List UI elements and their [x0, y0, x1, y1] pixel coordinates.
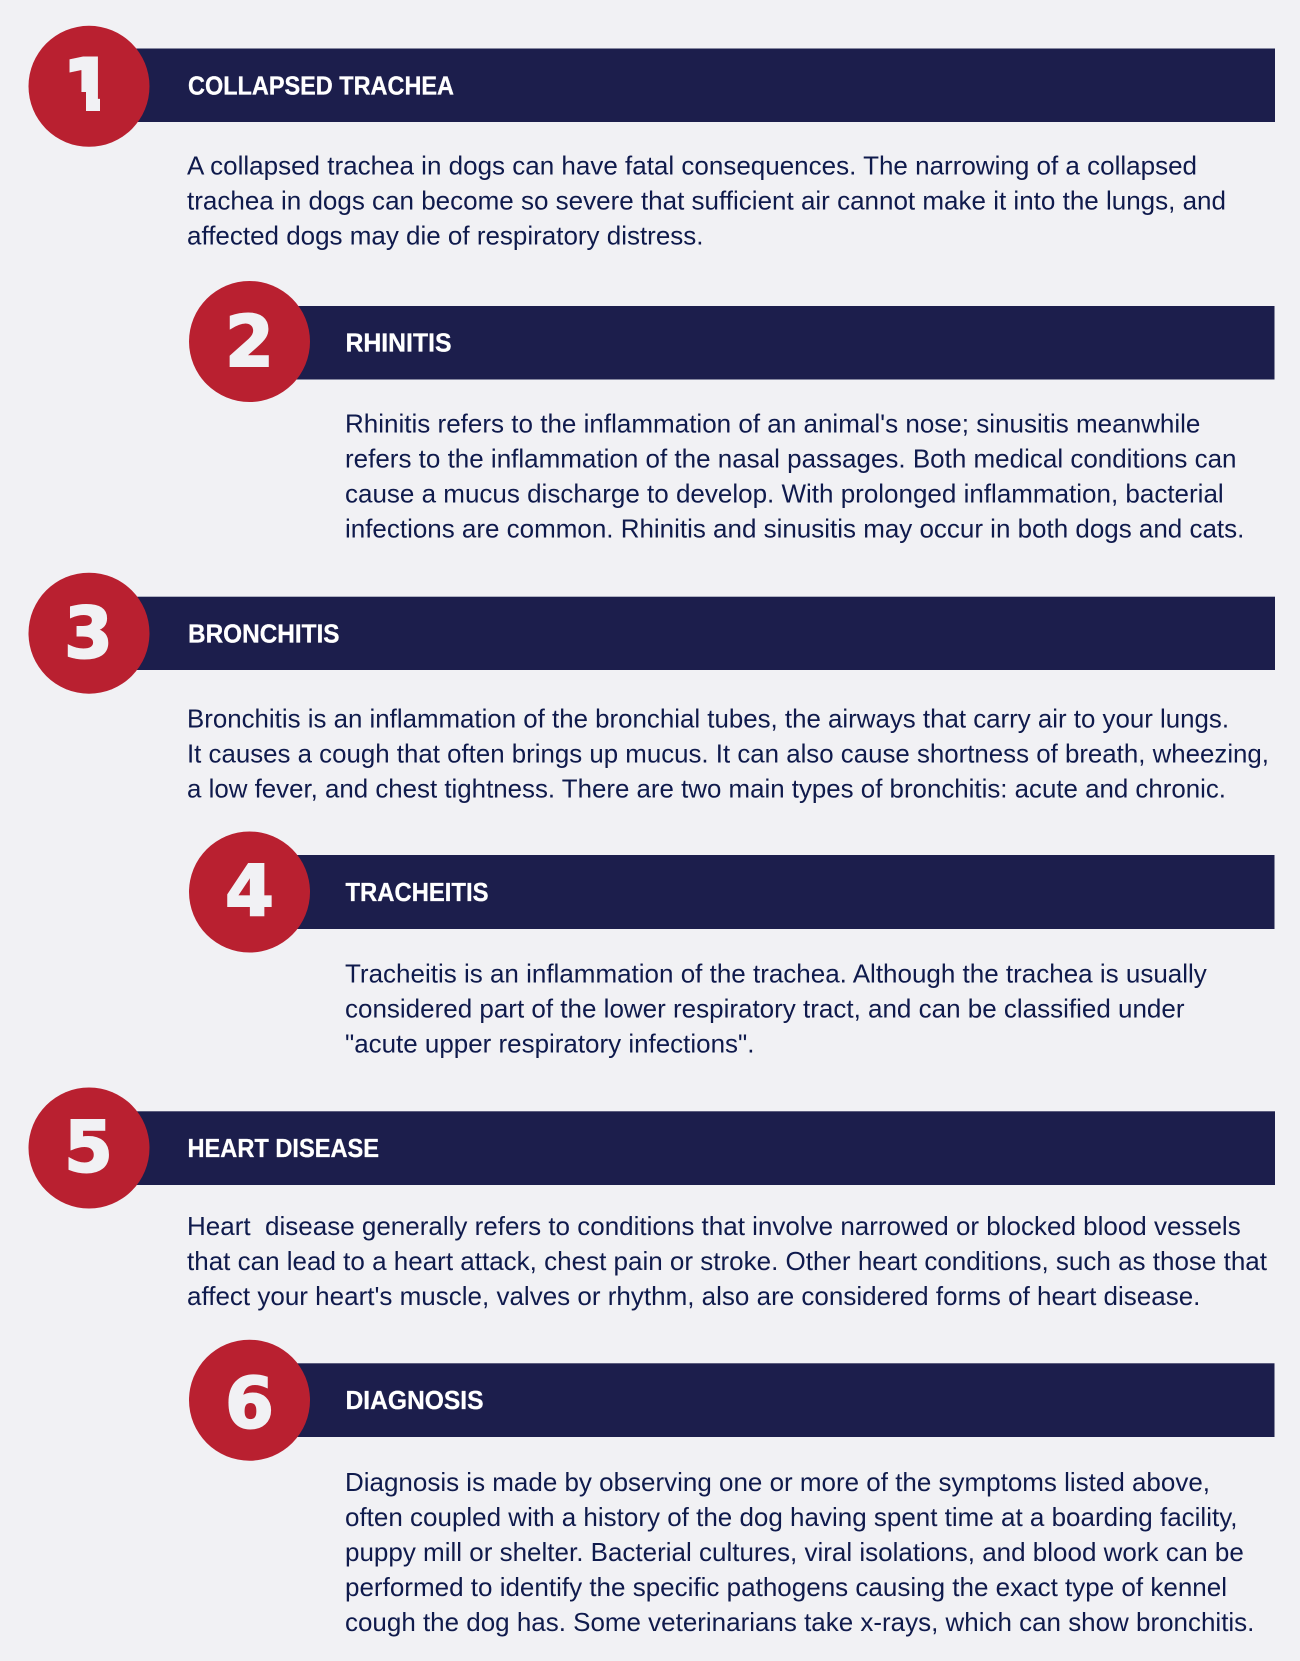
number badge 3	[28, 573, 150, 694]
body text 6	[345, 1467, 1254, 1637]
body text 1	[187, 151, 1226, 251]
number badge 2: 2	[225, 301, 274, 383]
body text 3: Bronchitis is an inflammation of the bronchial tubes, the airways that carry air to your lungs.	[187, 704, 1229, 734]
panel: 3 bronchitis	[28, 573, 1275, 804]
body text 6: often coupled with a history of the dog having spent time at a boarding facility,	[345, 1502, 1238, 1532]
body text 6: puppy mill or shelter. Bacterial cultures, viral isolations, and blood work can be	[345, 1537, 1244, 1567]
panel: 6 diagnosis	[189, 1340, 1274, 1637]
body text 5: Heart disease generally refers to conditions that involve narrowed or blocked blood vessels	[187, 1211, 1241, 1241]
panel: 2 rhinitis	[189, 281, 1274, 544]
header bar 6	[290, 1363, 1274, 1437]
number badge 5: 5	[64, 1106, 113, 1188]
body text 1: A collapsed trachea in dogs can have fatal consequences. The narrowing of a collapsed	[187, 151, 1197, 181]
header bar 3	[130, 597, 1275, 670]
body text 6: performed to identify the specific pathogens causing the exact type of kennel	[345, 1572, 1227, 1602]
header bar 2	[290, 306, 1274, 380]
number badge 4: 4	[225, 850, 274, 932]
number badge 1: 1	[64, 45, 112, 127]
body text 4: Tracheitis is an inflammation of the trachea. Although the trachea is usually	[345, 959, 1207, 989]
body text 6: cough the dog has. Some veterinarians take x-rays, which can show bronchitis.	[345, 1607, 1254, 1637]
body text 2: infections are common. Rhinitis and sinusitis may occur in both dogs and cats.	[345, 514, 1244, 544]
body text 6: Diagnosis is made by observing one or more of the symptoms listed above,	[345, 1467, 1210, 1497]
body text 4	[345, 959, 1207, 1059]
panel: 5 heart disease	[28, 1088, 1275, 1311]
number badge 6: 6	[225, 1362, 274, 1444]
number badge 6	[189, 1340, 310, 1461]
body text 1: affected dogs may die of respiratory distress.	[187, 221, 704, 251]
body text 4: considered part of the lower respiratory tract, and can be classified under	[345, 994, 1185, 1024]
heading 5: HEART DISEASE	[188, 1133, 379, 1163]
body text 5: that can lead to a heart attack, chest pain or stroke. Other heart conditions, such as those that	[187, 1246, 1268, 1276]
heading 6: DIAGNOSIS	[346, 1385, 484, 1415]
heading 2: RHINITIS	[346, 328, 452, 358]
panel: 1 collapsed trachea	[28, 26, 1275, 251]
number badge 5	[28, 1088, 150, 1208]
body text 2: refers to the inflammation of the nasal passages. Both medical conditions can	[345, 444, 1236, 474]
body text 3: It causes a cough that often brings up mucus. It can also cause shortness of breath, wheezing,	[187, 739, 1269, 769]
body text 2: cause a mucus discharge to develop. With prolonged inflammation, bacterial	[345, 479, 1224, 509]
number badge 2	[189, 281, 310, 402]
body text 2: Rhinitis refers to the inflammation of an animal's nose; sinusitis meanwhile	[345, 409, 1200, 439]
body text 3: a low fever, and chest tightness. There are two main types of bronchitis: acute and chronic.	[187, 774, 1226, 804]
number badge 1	[28, 26, 150, 147]
number badge 3: 3	[64, 592, 113, 674]
header bar 5	[130, 1111, 1275, 1185]
body text 3	[187, 704, 1269, 804]
panel: 4 tracheitis	[189, 832, 1274, 1059]
heading 3: BRONCHITIS	[188, 618, 340, 648]
header bar 4	[290, 855, 1274, 929]
number badge 4	[189, 832, 310, 952]
heading 1: COLLAPSED TRACHEA	[188, 70, 454, 100]
body text 4: "acute upper respiratory infections".	[345, 1029, 754, 1059]
body text 5	[187, 1211, 1268, 1311]
body text 1: trachea in dogs can become so severe that sufficient air cannot make it into the lungs, and	[187, 186, 1226, 216]
heading 4: TRACHEITIS	[346, 877, 488, 907]
body text 2	[345, 409, 1244, 544]
body text 5: affect your heart's muscle, valves or rhythm, also are considered forms of heart disease.	[187, 1281, 1200, 1311]
header bar 1	[130, 48, 1275, 122]
